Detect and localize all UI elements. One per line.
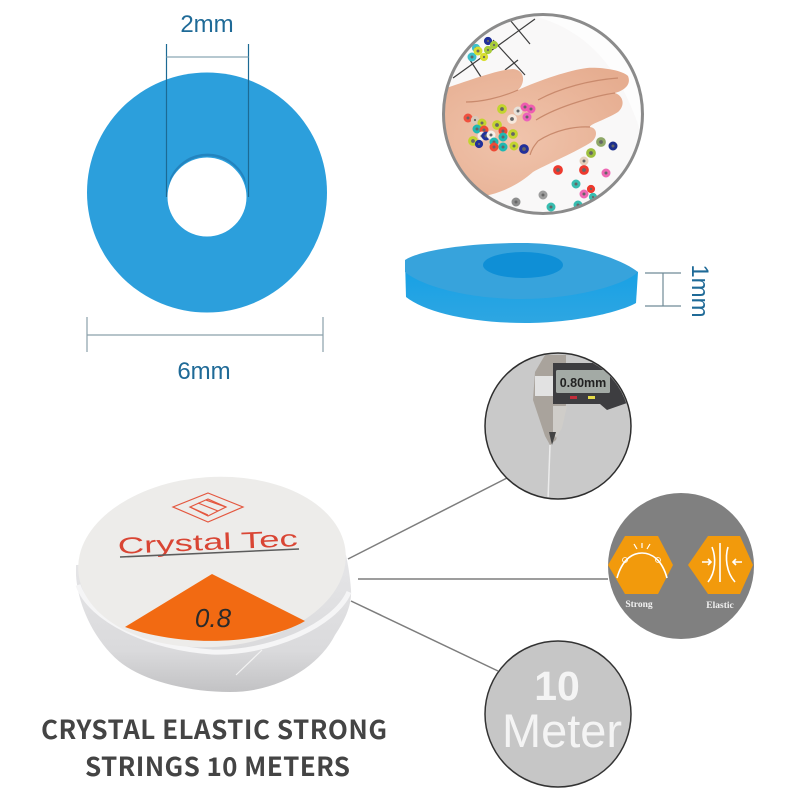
photo: beads in a hand (438, 14, 643, 214)
brand name: Crystal Tec (117, 525, 298, 559)
caption: STRINGS 10 METERS (85, 747, 350, 784)
beads on palm and fabric (465, 38, 616, 210)
orange triangle label (125, 574, 305, 641)
connector lines from spool (348, 478, 608, 671)
dimension: 1mm thickness (645, 264, 713, 318)
caption: CRYSTAL ELASTIC STRONG (41, 710, 387, 747)
callout: strong and elastic: Strong (625, 600, 653, 610)
callout: 10 meter: 10 (534, 663, 580, 709)
callout: 10 meter: Meter (502, 704, 622, 757)
callout: strong and elastic (608, 493, 754, 639)
caption (41, 710, 387, 784)
dimension: 6mm outer width: 6mm (177, 358, 231, 385)
hand shape (438, 68, 629, 197)
callout: caliper 0.80mm (485, 353, 631, 500)
photo: thread spool: 0.8 (195, 603, 232, 633)
spool label disc (72, 468, 352, 656)
photo: thread spool (72, 468, 352, 692)
callout: 10 meter (485, 641, 631, 787)
callout: strong and elastic: Elastic (706, 601, 734, 611)
dimension: 1mm thickness: 1mm (686, 264, 713, 318)
callout: caliper 0.80mm: 0.80mm (560, 376, 606, 390)
brand logo (173, 493, 243, 522)
icon: strong hexagon (608, 536, 673, 594)
dimension: 2mm hole width: 2mm (180, 11, 234, 38)
icon: blue bead front view (87, 72, 327, 312)
icon: elastic hexagon (688, 536, 753, 594)
icon: blue bead side view (405, 243, 638, 323)
